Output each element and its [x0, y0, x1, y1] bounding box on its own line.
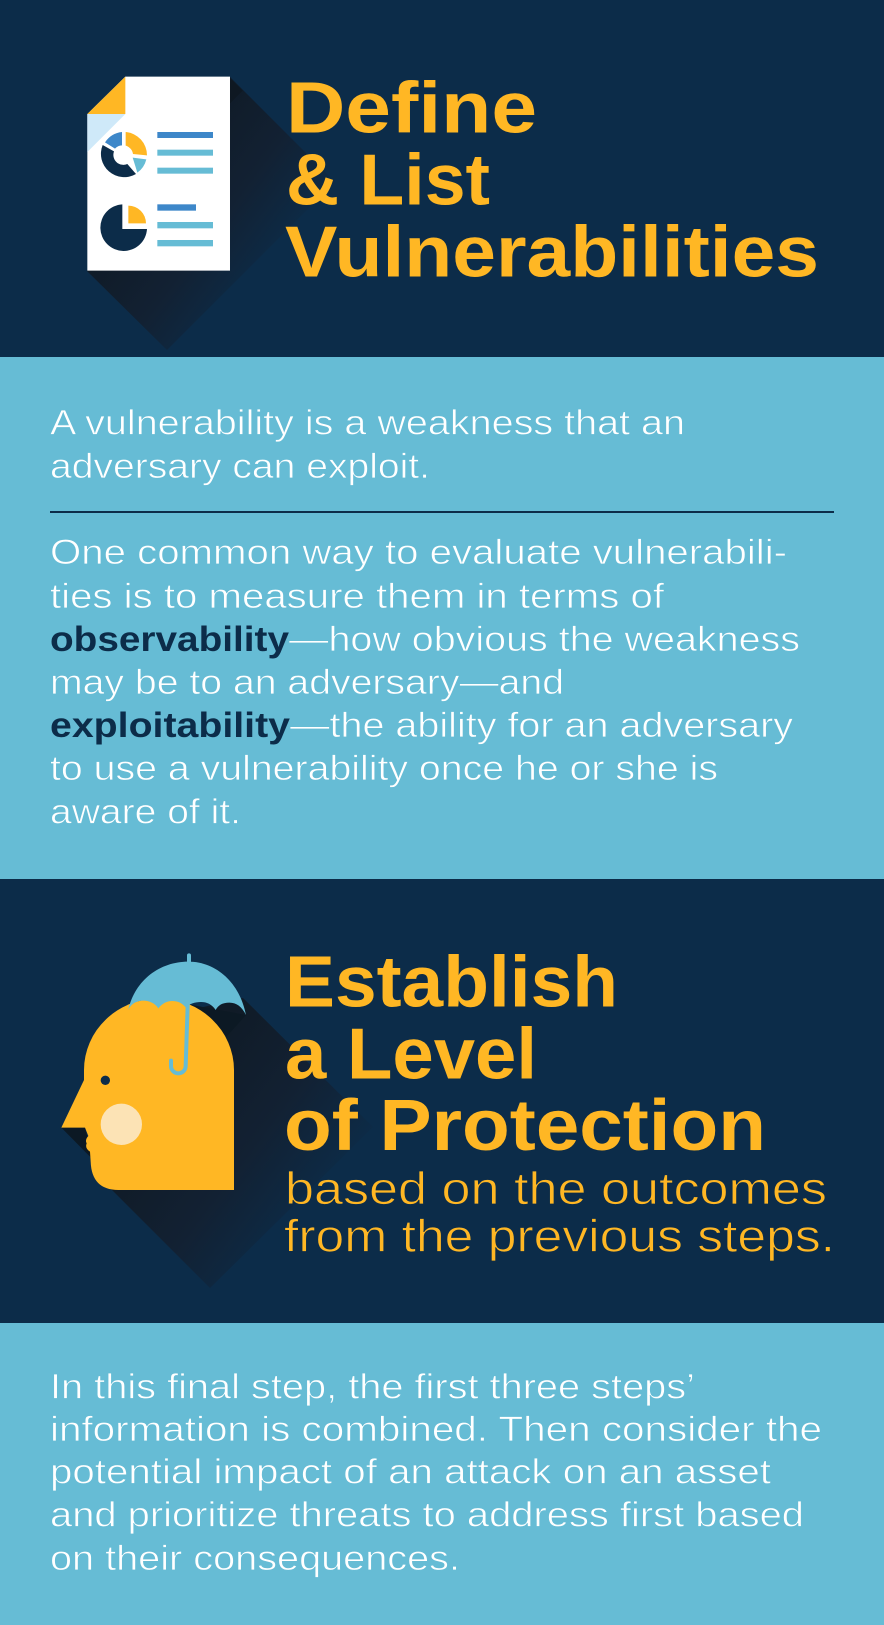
- panel: level of protection header: [0, 879, 884, 1323]
- text block: observability and exploitability: exploitability: [50, 706, 291, 745]
- text block: final step explanation: on their consequences.: [50, 1539, 460, 1578]
- subheading: based on the outcomes: [284, 1163, 835, 1262]
- heading: Establish a Level of Protection: Establish: [285, 943, 618, 1023]
- text block: observability and exploitability: [50, 533, 800, 832]
- panel: final step: [0, 1323, 884, 1625]
- text block: observability and exploitability: may be to an adversary—and: [50, 663, 564, 702]
- text block: observability and exploitability: ties is to measure them in terms of: [50, 577, 664, 616]
- text block: observability and exploitability: to use a vulnerability once he or she is: [50, 749, 718, 788]
- panel: vulnerability definition: [0, 357, 884, 879]
- heading: Define & List Vulnerabilities: Vulnerabilities: [285, 213, 819, 293]
- heading: Define & List Vulnerabilities: [285, 68, 819, 293]
- heading: Define & List Vulnerabilities: & List: [286, 140, 490, 220]
- panel: define vulnerabilities header: [0, 0, 884, 357]
- text block: final step explanation: [50, 1367, 822, 1578]
- heading: Establish a Level of Protection: [284, 943, 766, 1166]
- text block: definition: A vulnerability is a weakness that an: [50, 404, 685, 443]
- heading: Establish a Level of Protection: of Protection: [284, 1086, 766, 1166]
- subheading: based on the outcomes: from the previous steps.: [284, 1211, 835, 1262]
- text block: final step explanation: information is combined. Then consider the: [50, 1410, 822, 1449]
- text block: final step explanation: and prioritize threats to address first based: [50, 1496, 804, 1535]
- heading: Define & List Vulnerabilities: Define: [286, 68, 537, 148]
- text block: observability and exploitability: —the ability for an adversary: [290, 706, 794, 745]
- icon: document with pie charts: [87, 77, 335, 350]
- heading: Establish a Level of Protection: a Level: [285, 1014, 537, 1094]
- text block: observability and exploitability: aware of it.: [50, 793, 241, 832]
- text block: observability and exploitability: One common way to evaluate vulnerabili-: [50, 533, 787, 572]
- icon: head with umbrella: [61, 955, 373, 1288]
- subheading: based on the outcomes: based on the outcomes: [285, 1163, 827, 1214]
- text block: definition: [50, 404, 685, 486]
- text block: observability and exploitability: —how obvious the weakness: [289, 620, 800, 659]
- text block: definition: adversary can exploit.: [50, 447, 430, 486]
- text block: final step explanation: potential impact of an attack on an asset: [50, 1452, 771, 1491]
- text block: final step explanation: In this final step, the first three steps’: [50, 1367, 695, 1406]
- text block: observability and exploitability: observability: [50, 620, 290, 659]
